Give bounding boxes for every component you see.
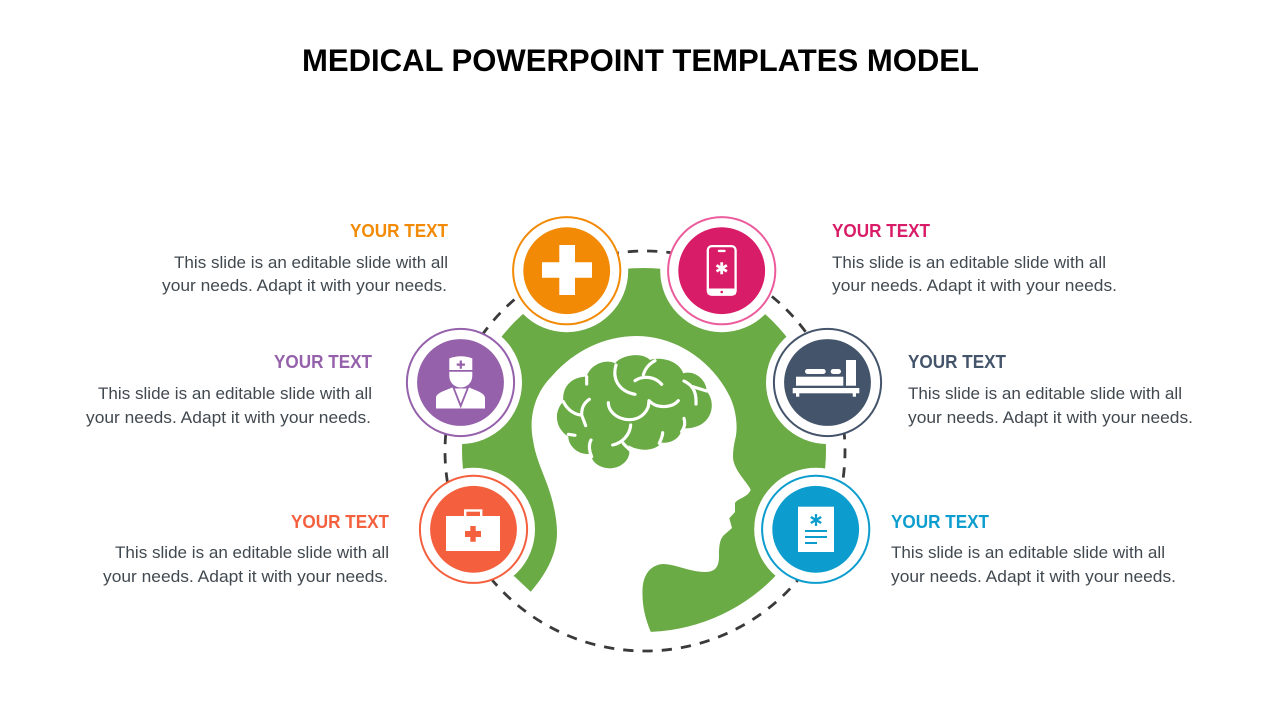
green disc [462, 268, 826, 632]
head silhouette [470, 336, 751, 660]
body: your needs. Adapt it with your needs. [832, 277, 1117, 295]
body: your needs. Adapt it with your needs. [103, 568, 388, 586]
text block: blue [891, 512, 1176, 586]
body [891, 544, 1176, 586]
text block: red [103, 512, 389, 586]
heading: YOUR TEXT [832, 221, 930, 241]
icon: doctor [407, 329, 514, 436]
heading: YOUR TEXT [350, 221, 448, 241]
body: This slide is an editable slide with all [98, 385, 372, 403]
icon: smartphone [668, 217, 775, 324]
icon: hospital bed [774, 329, 881, 436]
white halos behind icon circles [399, 209, 889, 591]
body: This slide is an editable slide with all [174, 254, 448, 272]
text block: pink [832, 221, 1117, 295]
text block: purple [86, 352, 372, 427]
text block: navy [908, 352, 1193, 427]
dashed orbit ring [445, 251, 845, 651]
heading: YOUR TEXT [274, 352, 372, 372]
heading: YOUR TEXT [291, 512, 389, 532]
icon: first aid kit [420, 476, 527, 583]
body: your needs. Adapt it with your needs. [891, 568, 1176, 586]
title: MEDICAL POWERPOINT TEMPLATES MODEL [302, 42, 979, 78]
body [86, 385, 372, 427]
brain [557, 355, 712, 468]
icon: medical document [762, 476, 869, 583]
body [103, 544, 389, 586]
body: your needs. Adapt it with your needs. [162, 277, 447, 295]
body [162, 254, 448, 295]
heading: YOUR TEXT [891, 512, 989, 532]
body: your needs. Adapt it with your needs. [908, 409, 1193, 427]
icon: medical cross [513, 217, 620, 324]
body: This slide is an editable slide with all [908, 385, 1182, 403]
heading: YOUR TEXT [908, 352, 1006, 372]
body: This slide is an editable slide with all [115, 544, 389, 562]
body: This slide is an editable slide with all [832, 254, 1106, 272]
central diagram: green head in ring [462, 268, 826, 660]
text block: orange [162, 221, 448, 295]
body [908, 385, 1193, 427]
body: your needs. Adapt it with your needs. [86, 409, 371, 427]
body: This slide is an editable slide with all [891, 544, 1165, 562]
body [832, 254, 1117, 295]
